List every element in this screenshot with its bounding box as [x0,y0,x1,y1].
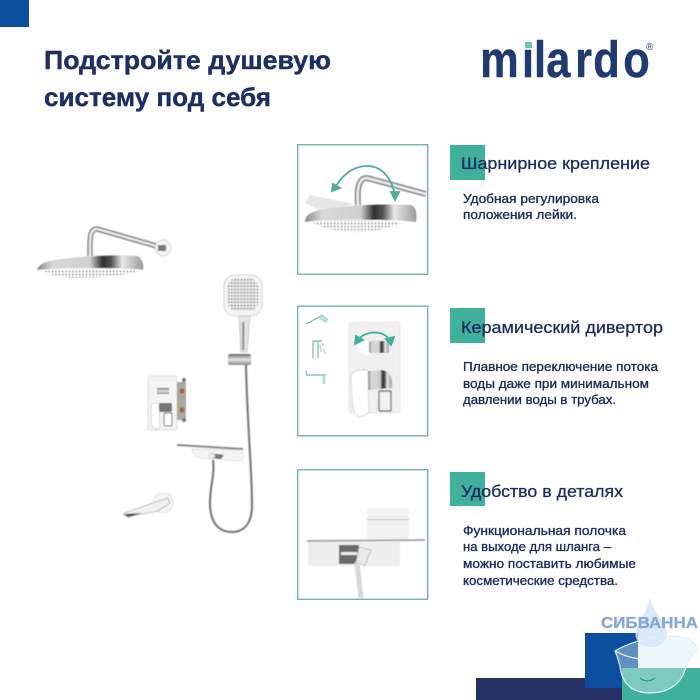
text block: ceramic diverter: воды даже при минимальном [463,376,649,391]
text block: ceramic diverter: Плавное переключение потока [463,359,659,374]
logo: milardo: milardo [480,32,650,89]
hose [357,562,361,598]
hose [210,365,252,532]
watermark: Сибванна [601,597,698,693]
icon: overhead shower [306,315,328,324]
panel: details image [298,470,428,599]
icon: tub spout [306,371,326,384]
text block: details [450,472,636,588]
cup [367,508,409,539]
product: full shower system [37,229,262,532]
hose holder [228,354,251,365]
title: Подстройте душевую [44,45,331,75]
text block: ceramic diverter: Керамический дивертор [461,318,663,337]
head [305,204,416,222]
title: систему под себя [44,82,271,112]
watermark: Сибванна: СИБВАННА [601,615,698,632]
arrow: rotate diverter [355,332,394,345]
connector [339,545,359,564]
text block: swivel mount: положения лейки. [463,207,577,222]
shelf [307,539,425,542]
corner square [0,0,29,27]
mixer panel [148,376,186,430]
title [44,45,331,112]
text block: details: Функциональная полочка [463,523,627,538]
tub spout [124,493,173,517]
logo: milardo: ® [646,42,654,53]
text block: swivel mount: Удобная регулировка [463,191,600,206]
corner blocks [476,633,700,700]
rain shower head [37,255,143,279]
arm [358,178,426,205]
ghost tilted head [305,195,355,211]
text block: details: косметические средства. [463,573,618,588]
text block: details: Удобство в деталях [461,482,624,501]
text block: ceramic diverter [450,308,663,407]
mixer plate [349,322,400,416]
text block: swivel mount [450,145,650,222]
ceiling shower arm [90,229,171,256]
text block: details: можно поставить любимые [463,556,636,571]
hose shelf [177,444,243,461]
arrow: swivel [332,166,399,200]
text block: details: на выходе для шланга – [463,539,612,554]
panel: ceramic diverter image [298,306,428,436]
icon: hand shower [313,341,325,358]
hand shower [224,275,262,352]
text block: swivel mount: Шарнирное крепление [461,154,650,173]
text block: ceramic diverter: давлении воды в трубах. [463,392,616,407]
panel: swivel mount image [298,145,428,274]
